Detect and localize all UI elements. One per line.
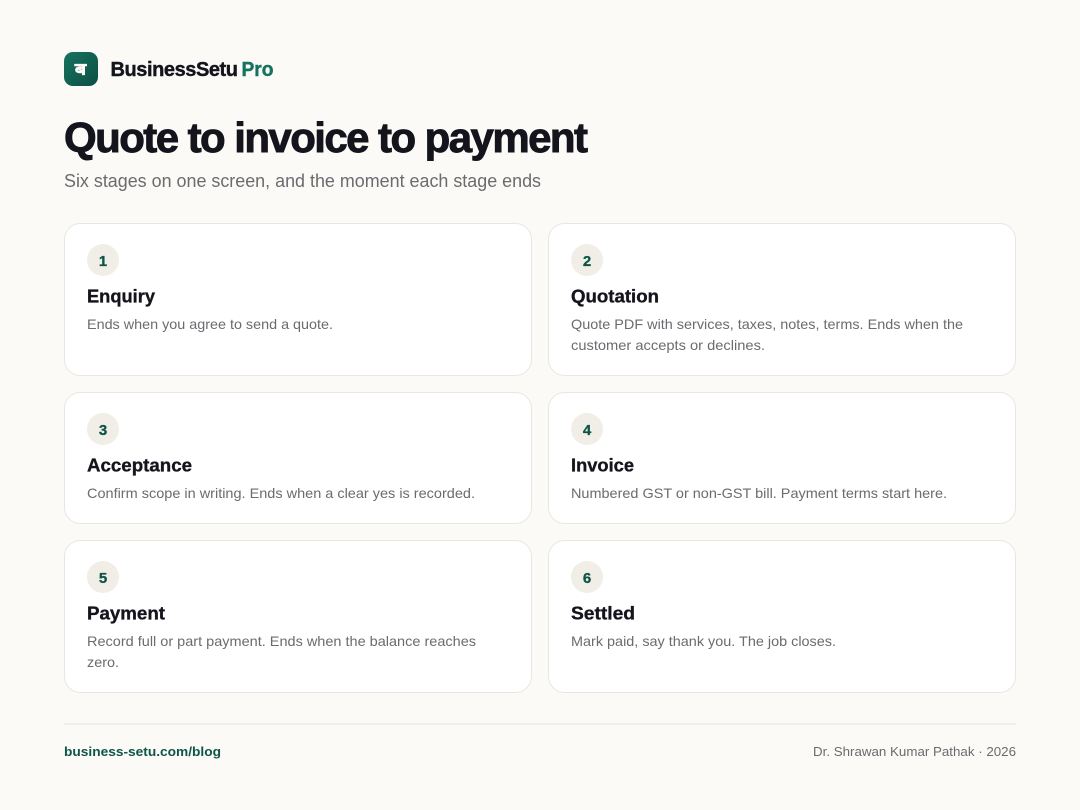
badge: 1: 1 bbox=[99, 253, 107, 270]
panel: stage 5 Payment bbox=[64, 540, 532, 692]
badge: 2 bbox=[571, 244, 603, 276]
badge: 5 bbox=[87, 561, 119, 593]
badge: 4: 4 bbox=[583, 422, 592, 439]
badge: 3: 3 bbox=[99, 422, 107, 439]
footer credit: Dr. Shrawan Kumar Pathak · 2026 bbox=[813, 744, 1016, 759]
icon: brand logo: ब bbox=[74, 62, 87, 78]
heading: Enquiry: Enquiry bbox=[87, 286, 156, 306]
description: Payment: Record full or part payment. Ends when the balance reaches bbox=[87, 633, 476, 649]
panel: stage 1 Enquiry bbox=[64, 224, 532, 376]
subtitle: Six stages on one screen, and the moment each stage ends bbox=[64, 171, 541, 191]
badge: 3 bbox=[87, 413, 119, 445]
footer link: business-setu.com/blog bbox=[64, 744, 221, 759]
badge: 6: 6 bbox=[583, 570, 591, 587]
panel: stage 2 Quotation bbox=[548, 224, 1016, 376]
brand header bbox=[64, 52, 274, 86]
description: Quotation: Quote PDF with services, taxes, notes, terms. Ends when the bbox=[571, 316, 963, 332]
description: Acceptance: Confirm scope in writing. Ends when a clear yes is recorded. bbox=[87, 485, 475, 501]
heading: Payment: Payment bbox=[87, 602, 165, 624]
heading: Quotation: Quotation bbox=[571, 286, 659, 306]
heading: Acceptance: Acceptance bbox=[87, 454, 192, 476]
badge: 1 bbox=[87, 244, 119, 276]
description: Quotation: customer accepts or declines. bbox=[571, 337, 765, 353]
badge: 4 bbox=[571, 413, 603, 445]
icon: brand logo bbox=[64, 52, 98, 86]
panel: stage 6 Settled bbox=[548, 540, 1016, 692]
badge: 6 bbox=[571, 561, 603, 593]
panel: stage 3 Acceptance bbox=[64, 392, 532, 524]
heading: Settled: Settled bbox=[571, 602, 635, 624]
badge: 5: 5 bbox=[99, 570, 107, 587]
brand suffix: Pro: Pro bbox=[242, 59, 274, 81]
description: Settled: Mark paid, say thank you. The job closes. bbox=[571, 633, 836, 649]
brand name: BusinessSetu bbox=[110, 59, 238, 81]
heading: Invoice: Invoice bbox=[571, 454, 634, 476]
description: Payment bbox=[87, 633, 476, 670]
description: Payment: zero. bbox=[87, 654, 119, 670]
title: Quote to invoice to payment bbox=[64, 114, 588, 161]
description: Invoice: Numbered GST or non-GST bill. Payment terms start here. bbox=[571, 485, 947, 501]
badge: 2: 2 bbox=[583, 253, 591, 270]
panel: stage 4 Invoice bbox=[548, 392, 1016, 524]
description: Enquiry: Ends when you agree to send a quote. bbox=[87, 316, 333, 332]
description: Quotation bbox=[571, 316, 963, 353]
